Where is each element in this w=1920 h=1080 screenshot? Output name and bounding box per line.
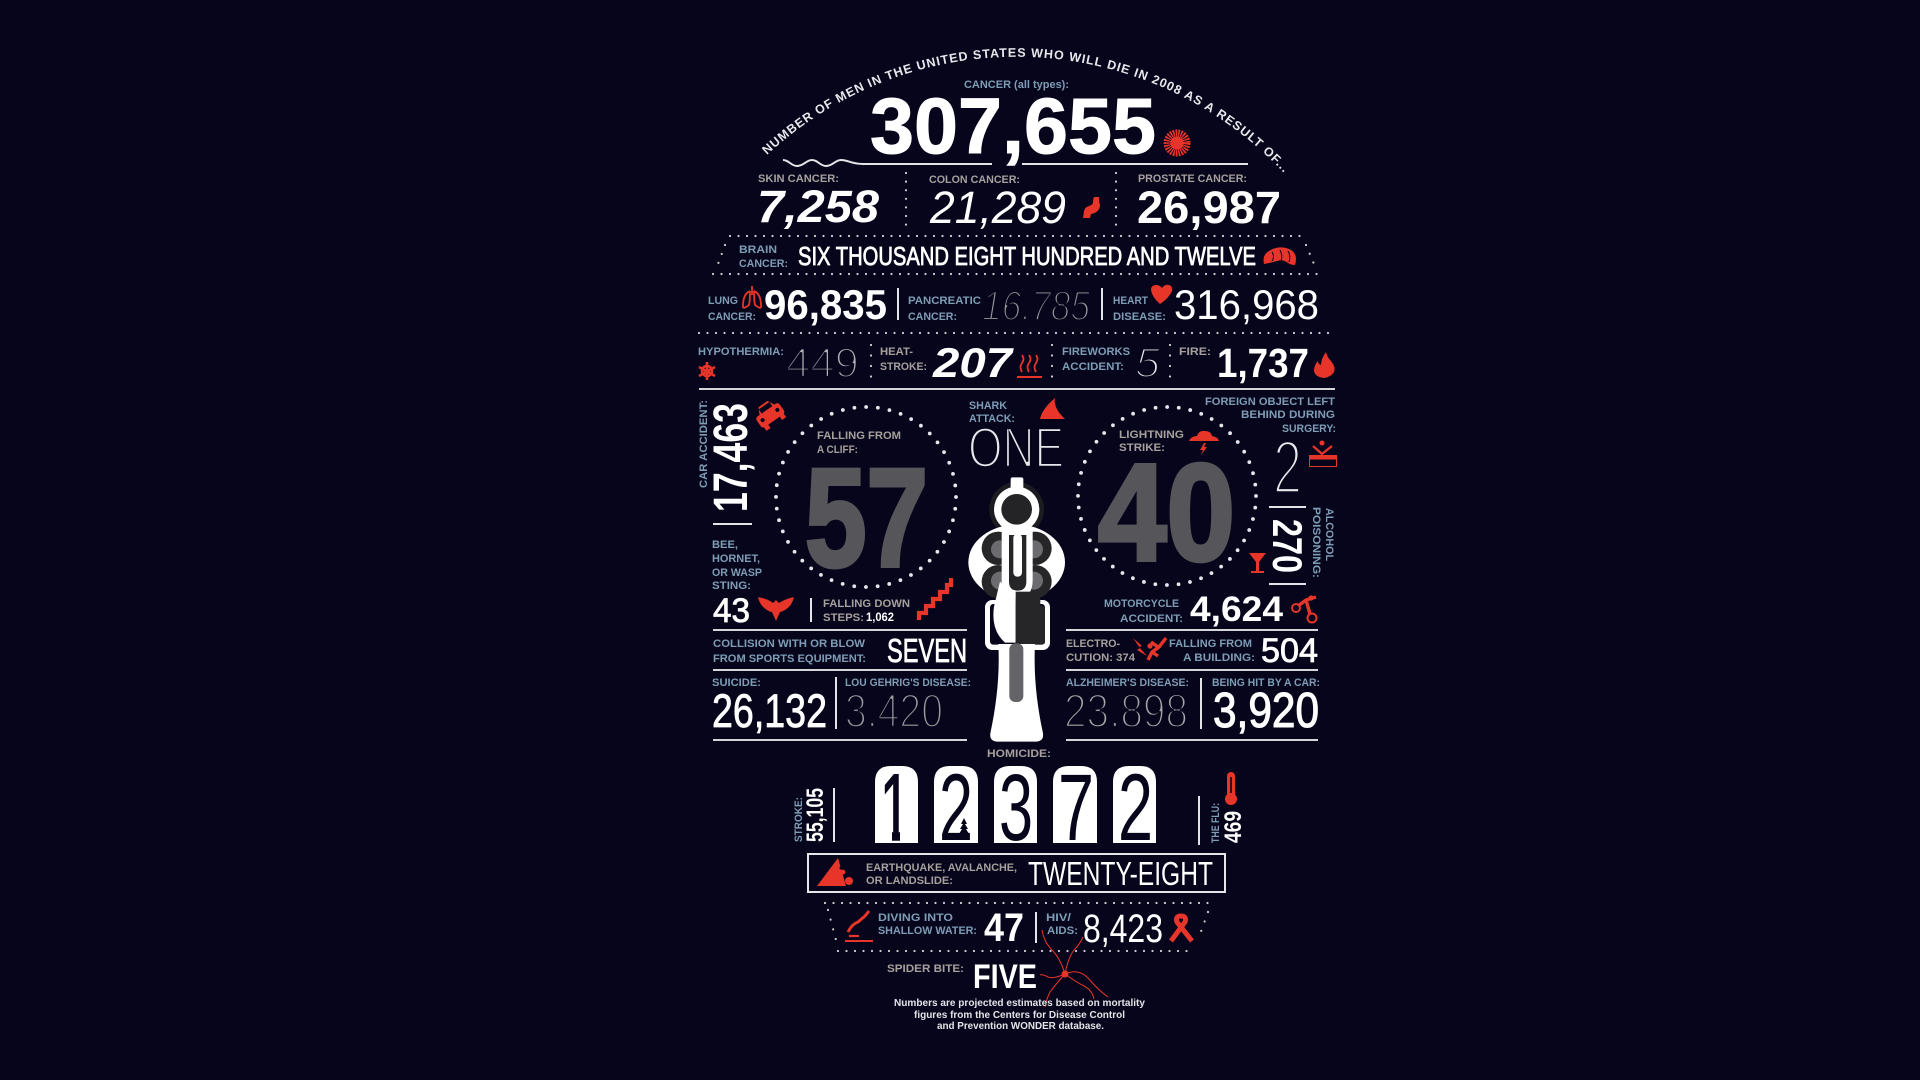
stat: hiv aids: 8,423	[1083, 907, 1163, 951]
stat: foreign object left behind during surgery: SURGERY:	[1282, 423, 1336, 435]
stat: car accident: CAR ACCIDENT:	[698, 400, 710, 488]
wavy underline	[783, 160, 1248, 166]
stat: brain cancer: CANCER:	[739, 258, 788, 270]
stat: shark attack: SHARK	[969, 400, 1007, 412]
stat: pancreatic cancer: 16,785	[982, 282, 1091, 329]
stat: heat stroke: STROKE:	[880, 361, 927, 373]
stat: falling from a building	[1169, 632, 1318, 670]
stat: stroke: STROKE:	[793, 797, 805, 842]
stat: pancreatic cancer: PANCREATIC	[908, 295, 981, 307]
stat: spider bite: SPIDER BITE:	[887, 963, 964, 975]
panel: earthquake avalanche landslide: TWENTY-EIGHT	[1028, 855, 1213, 892]
stat: alcohol poisoning	[1264, 507, 1335, 578]
stat: alcohol poisoning: POISONING:	[1310, 507, 1322, 578]
stat: shark attack: ONE	[968, 416, 1064, 480]
stat: pancreatic cancer: CANCER:	[908, 311, 957, 323]
icon: bee	[758, 597, 794, 621]
stat: hypothermia: HYPOTHERMIA:	[698, 346, 784, 358]
stat: collision with sports equipment: COLLISION WITH OR BLOW	[713, 638, 866, 650]
stat: diving into shallow water: SHALLOW WATER:	[878, 925, 977, 937]
stat: skin cancer: SKIN CANCER:	[758, 173, 839, 185]
stat: heat stroke	[880, 339, 1014, 386]
stat: collision with sports equipment: FROM SPORTS EQUIPMENT:	[713, 653, 866, 665]
stat: fireworks accident: FIREWORKS	[1062, 346, 1130, 358]
icon: aids ribbon	[1171, 916, 1192, 941]
stat: lung cancer	[708, 281, 887, 328]
stat: skin cancer: 7,258	[757, 181, 879, 232]
panel: earthquake avalanche landslide: EARTHQUAKE, AVALANCHE,	[866, 862, 1017, 874]
stat: foreign object left behind during surgery	[1205, 396, 1336, 509]
stat: lou gehrig's disease: 3,420	[845, 684, 943, 737]
stat: motorcycle accident	[1104, 590, 1284, 629]
panel: lightning strike: LIGHTNING	[1119, 429, 1184, 441]
stat: spider bite: FIVE	[973, 958, 1037, 996]
stat: cancer all types: CANCER (all types):	[964, 79, 1069, 91]
stat: diving into shallow water: DIVING INTO	[878, 912, 953, 924]
stat: hypothermia	[698, 339, 859, 386]
stat: prostate cancer: PROSTATE CANCER:	[1138, 173, 1247, 185]
stat: foreign object left behind during surgery: FOREIGN OBJECT LEFT	[1205, 396, 1335, 408]
icon: snowflake	[699, 362, 715, 380]
stat: collision with sports equipment: SEVEN	[887, 632, 967, 669]
stat: alcohol poisoning: ALCOHOL	[1323, 508, 1335, 561]
icon: flame	[1314, 352, 1335, 378]
curved title: NUMBER OF MEN IN THE UNITED STATES WHO WILL DIE IN 2008 AS A RESULT OF...	[762, 48, 1284, 172]
stat: motorcycle accident: 4,624	[1190, 590, 1284, 629]
stat: homicide label: HOMICIDE:	[987, 748, 1051, 760]
stat: homicide number tiles: 2	[939, 755, 973, 861]
panel: falling from a cliff: A CLIFF:	[817, 444, 858, 456]
stat: heart disease	[1113, 281, 1319, 328]
stat: diving into shallow water: 47	[984, 906, 1024, 950]
icon: car	[751, 396, 788, 432]
icon: motorcycle	[1292, 595, 1316, 622]
icon: stairs	[919, 578, 951, 620]
stat: homicide number tiles: 3	[999, 755, 1033, 861]
stat: bee hornet wasp sting: BEE,	[712, 539, 738, 551]
stat: the flu: THE FLU:	[1210, 803, 1222, 843]
stat: fireworks accident: ACCIDENT:	[1062, 361, 1124, 373]
stat: stroke	[793, 788, 829, 842]
stat: brain cancer: BRAIN	[739, 244, 777, 256]
stat: shark attack	[968, 400, 1064, 480]
stat: fireworks accident: 5	[1135, 339, 1161, 386]
stat: being hit by a car: BEING HIT BY A CAR:	[1212, 677, 1320, 689]
panel: falling from a cliff: FALLING FROM	[817, 430, 901, 442]
stat: pancreatic cancer	[908, 282, 1091, 329]
stat: homicide number tiles	[875, 755, 1156, 861]
stat: motorcycle accident: MOTORCYCLE	[1104, 598, 1179, 610]
stat: fireworks accident	[1062, 339, 1161, 386]
icon: spider	[1040, 930, 1108, 1007]
stat: motorcycle accident: ACCIDENT:	[1120, 613, 1183, 625]
stat: car accident: 17,463	[705, 403, 758, 512]
stat: alzheimer's disease: 23,898	[1064, 684, 1188, 737]
stat: prostate cancer: 26,987	[1137, 182, 1281, 233]
stat: heat stroke: 207	[932, 339, 1014, 386]
panel: earthquake avalanche landslide: OR LANDSLIDE:	[866, 875, 953, 887]
icon: surgery table	[1309, 440, 1337, 466]
icon: revolver	[968, 477, 1065, 742]
stat: suicide: 26,132	[712, 684, 827, 737]
stat: hypothermia: 449	[786, 339, 859, 386]
stat: bee hornet wasp sting	[712, 539, 762, 630]
stat: lung cancer: CANCER:	[708, 311, 756, 323]
stat: fire: 1,737	[1217, 340, 1309, 386]
panel: falling from a cliff	[776, 407, 956, 596]
icon: cocktail glass	[1249, 553, 1266, 573]
stat: falling down steps	[823, 598, 910, 624]
footnote: and Prevention WONDER database.	[937, 1021, 1104, 1032]
stat: lou gehrig's disease: LOU GEHRIG'S DISEASE:	[845, 677, 971, 689]
stat: homicide number tiles: 2	[1118, 755, 1153, 861]
stat: hiv aids: HIV/	[1046, 912, 1071, 924]
stat: heart disease: HEART	[1113, 295, 1148, 307]
stat: alzheimer's disease: ALZHEIMER'S DISEASE:	[1066, 677, 1189, 689]
icon: colon	[1083, 197, 1100, 218]
stat: shark attack: ATTACK:	[969, 413, 1015, 425]
stat: the flu: 469	[1220, 811, 1247, 843]
icon: heat waves	[1017, 355, 1042, 377]
footnote: figures from the Centers for Disease Control	[914, 1010, 1125, 1021]
stat: falling from a building: 504	[1261, 632, 1318, 670]
stat: stroke: 55,105	[802, 788, 829, 842]
stat: alcohol poisoning: 270	[1264, 519, 1311, 573]
stat: falling down steps: FALLING DOWN	[823, 598, 910, 610]
icon: shark fin	[1040, 398, 1065, 419]
stat: homicide number tiles: 7	[1058, 755, 1094, 861]
stat: foreign object left behind during surgery: 2	[1273, 425, 1302, 509]
stat: hiv aids: AIDS:	[1047, 925, 1078, 937]
icon: cancer burst	[1168, 134, 1186, 152]
stat: bee hornet wasp sting: OR WASP	[712, 567, 762, 579]
icon: rockslide	[817, 858, 853, 886]
stat: being hit by a car: 3,920	[1213, 684, 1319, 738]
footnote	[894, 998, 1145, 1032]
stat: electrocution: ELECTRO-	[1066, 638, 1120, 650]
panel: earthquake avalanche landslide	[808, 854, 1225, 892]
stat: fire	[1179, 340, 1309, 386]
stat: heart disease: DISEASE:	[1113, 311, 1166, 323]
stat: electrocution: CUTION: 374	[1066, 652, 1136, 664]
panel: lightning strike: STRIKE:	[1119, 442, 1165, 454]
stat: brain cancer: SIX THOUSAND EIGHT HUNDRED AND TWELVE	[798, 241, 1256, 271]
stat: falling from a building: A BUILDING:	[1183, 652, 1255, 664]
stat: collision with sports equipment	[713, 632, 967, 669]
stat: car accident	[698, 400, 758, 512]
panel: lightning strike: 40	[1098, 436, 1235, 590]
icon: diving figure	[845, 911, 873, 941]
icon: thermometer	[1225, 772, 1237, 805]
stat: heart disease: 316,968	[1174, 281, 1319, 328]
stat: foreign object left behind during surgery: BEHIND DURING	[1241, 409, 1335, 421]
icon: heart	[1151, 285, 1172, 304]
footnote: Numbers are projected estimates based on mortality	[894, 998, 1145, 1009]
stat: colon cancer: COLON CANCER:	[929, 174, 1020, 186]
stat: falling down steps: STEPS:	[823, 612, 864, 624]
stat: electrocution	[1066, 638, 1136, 664]
stat: bee hornet wasp sting: STING:	[712, 580, 751, 592]
stat: hiv aids	[1046, 907, 1163, 951]
stat: falling from a building: FALLING FROM	[1169, 638, 1252, 650]
stat: fire: FIRE:	[1179, 346, 1211, 358]
stat: falling down steps: 1,062	[866, 612, 894, 624]
stat: heat stroke: HEAT-	[880, 346, 913, 358]
icon: storm cloud	[1189, 431, 1219, 455]
icon: brain	[1264, 247, 1296, 265]
stat: lung cancer: LUNG	[708, 295, 738, 307]
stat: bee hornet wasp sting: HORNET,	[712, 553, 760, 565]
icon: electrocuted figure	[1133, 638, 1166, 660]
stat: lung cancer: 96,835	[764, 281, 887, 328]
panel: falling from a cliff: 57	[805, 439, 928, 596]
stat: bee hornet wasp sting: 43	[713, 592, 750, 630]
stat: colon cancer: 21,289	[929, 182, 1066, 233]
stat: homicide number tiles: 1	[880, 755, 910, 861]
stat: suicide: SUICIDE:	[712, 677, 761, 689]
stat: spider bite	[887, 958, 1037, 996]
stat: diving into shallow water	[878, 906, 1024, 950]
stat: cancer all types: 307,655	[870, 81, 1156, 170]
icon: lungs	[743, 286, 761, 308]
